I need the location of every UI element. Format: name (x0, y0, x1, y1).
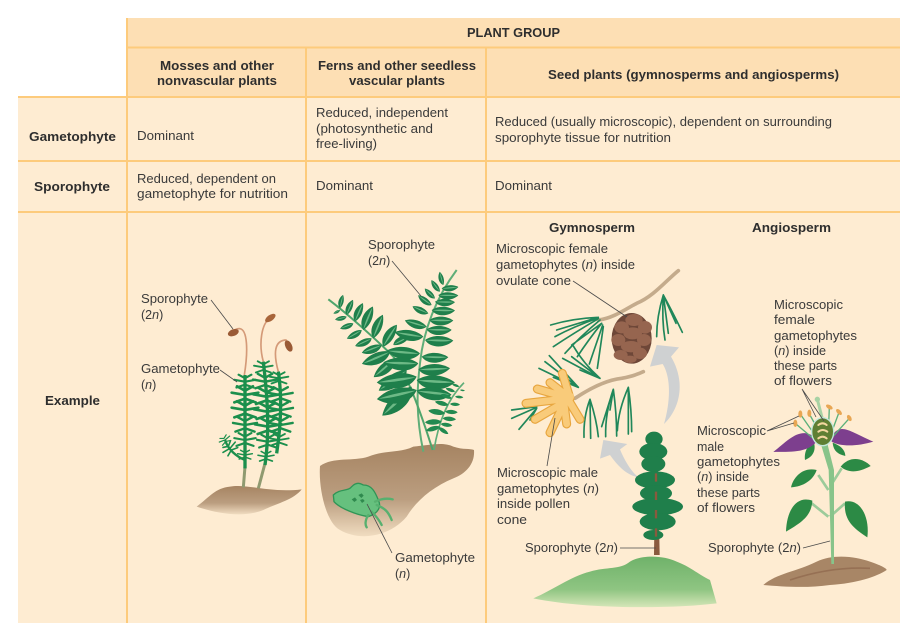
label: angiosperm female gametophytes: gametophytes (774, 329, 857, 343)
cell: fern sporophyte: Dominant (316, 179, 374, 193)
illustration: angiosperm (763, 397, 887, 587)
label: angiosperm male gametophytes: male (697, 440, 724, 454)
label: fern sporophyte (368, 238, 435, 296)
ovulate cone (611, 313, 652, 364)
label: fern sporophyte: Sporophyte (368, 238, 435, 252)
cell: moss sporophyte (137, 172, 288, 201)
column heading: mosses (157, 59, 277, 88)
label: angiosperm female gametophytes: Microscopic (774, 298, 843, 312)
label: gymnosperm sporophyte: Sporophyte (2n) (525, 541, 618, 555)
left frond leaflets (333, 294, 418, 422)
label: angiosperm male gametophytes: Microscopic (697, 424, 766, 438)
label: ovulate cone: ovulate cone (496, 274, 571, 288)
illustration: fern (320, 270, 474, 536)
label: angiosperm female gametophytes: female (774, 313, 815, 327)
label: moss sporophyte: Sporophyte (141, 292, 208, 306)
column heading: mosses: nonvascular plants (157, 74, 277, 88)
label: moss gametophyte: (n) (141, 378, 156, 392)
label: fern gametophyte: (n) (395, 567, 410, 581)
cell: fern gametophyte: Reduced, independent (316, 106, 449, 120)
tree (632, 432, 683, 555)
label: ovulate cone (496, 242, 635, 317)
label: moss sporophyte: (2n) (141, 308, 163, 322)
illustration: gymnosperm (512, 271, 717, 607)
cell: moss sporophyte: Reduced, dependent on (137, 172, 276, 186)
label: angiosperm female gametophytes: of flowers (774, 374, 832, 388)
pollen cone (526, 373, 580, 433)
label: angiosperm sporophyte: Sporophyte (2n) (708, 541, 801, 555)
cell: moss gametophyte: Dominant (137, 129, 195, 143)
cell: seed plant gametophyte: Reduced (usually microscopic), dependent on surrounding (495, 115, 832, 129)
column heading: ferns (318, 59, 476, 88)
label: moss sporophyte (141, 292, 233, 329)
row heading: example: Example (45, 394, 100, 408)
heading: plant group: PLANT GROUP (467, 26, 560, 40)
cell: moss sporophyte: gametophyte for nutrition (137, 187, 288, 201)
column heading: ferns: vascular plants (349, 74, 445, 88)
hill (533, 557, 717, 607)
label: pollen cone (497, 418, 599, 527)
label: ovulate cone: Microscopic female (496, 242, 608, 256)
small frond leaflets (425, 383, 465, 436)
label: angiosperm female gametophytes: (n) inside (774, 344, 826, 358)
label: ovulate cone: gametophytes ( n) inside (496, 258, 635, 272)
label: moss gametophyte (141, 362, 237, 392)
fern gametophyte (333, 483, 393, 527)
label: pollen cone: gametophytes ( n) (497, 482, 599, 496)
label: fern gametophyte: Gametophyte (395, 551, 475, 565)
cell: seed plant sporophyte: Dominant (495, 179, 553, 193)
arrows (600, 345, 680, 477)
label: pollen cone: inside pollen (497, 497, 570, 511)
label: fern sporophyte: (2n) (368, 254, 390, 268)
subheading: angiosperm: Angiosperm (752, 221, 831, 235)
column heading: seed plants: Seed plants (gymnosperms and angiosperms) (548, 68, 839, 82)
illustration: moss (197, 312, 302, 514)
label: angiosperm male gametophytes: (n) inside (697, 470, 749, 484)
row heading: sporophyte: Sporophyte (34, 180, 110, 194)
subheading: gymnosperm: Gymnosperm (549, 221, 635, 235)
lower branch (575, 372, 643, 398)
needles (512, 295, 682, 438)
column heading: mosses: Mosses and other (160, 59, 274, 73)
column heading: ferns: Ferns and other seedless (318, 59, 476, 73)
label: pollen cone: Microscopic male (497, 466, 598, 480)
cell: fern gametophyte: free-living) (316, 137, 377, 151)
label: angiosperm female gametophytes (774, 298, 857, 421)
label: angiosperm male gametophytes (697, 416, 799, 515)
cell: seed plant gametophyte: sporophyte tissue for nutrition (495, 131, 671, 145)
cell: fern gametophyte (316, 106, 449, 151)
upper branch (598, 271, 678, 320)
label: angiosperm male gametophytes: gametophytes (697, 455, 780, 469)
main frond leaflets (375, 271, 459, 407)
label: angiosperm male gametophytes: of flowers (697, 501, 755, 515)
row heading: gametophyte: Gametophyte (29, 130, 116, 144)
label: angiosperm female gametophytes: these parts (774, 359, 837, 373)
label: pollen cone: cone (497, 513, 527, 527)
label: fern gametophyte (367, 504, 475, 581)
label: moss gametophyte: Gametophyte (141, 362, 220, 376)
label: angiosperm male gametophytes: these parts (697, 486, 760, 500)
cell: seed plant gametophyte (495, 115, 832, 145)
cell: fern gametophyte: (photosynthetic and (316, 122, 433, 136)
